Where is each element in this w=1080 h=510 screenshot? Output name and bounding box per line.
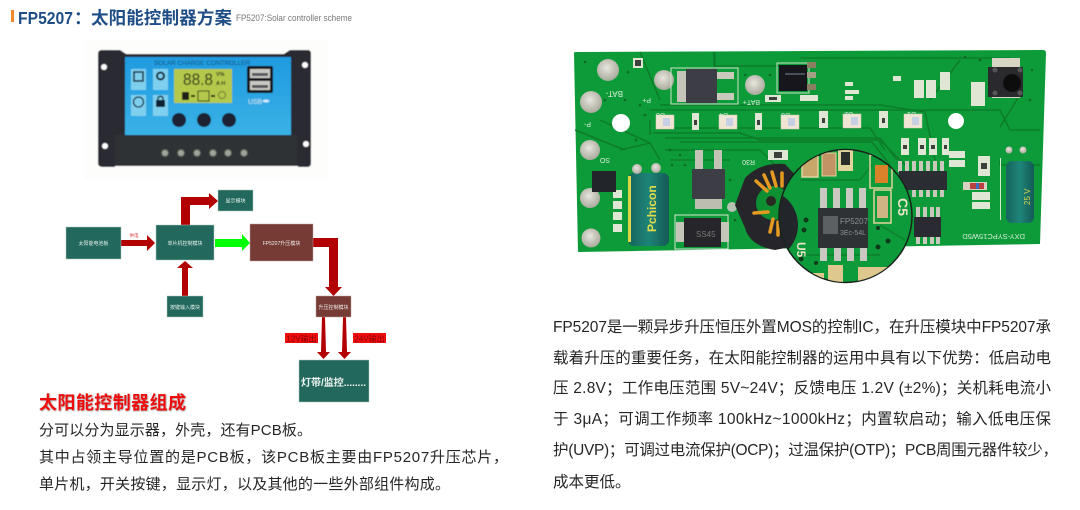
title: 太阳能控制器方案 xyxy=(91,8,232,28)
box: display module: 显示模块 xyxy=(225,198,246,204)
photo: solar charge controller xyxy=(84,40,328,180)
controller LCD: 88.8 xyxy=(183,70,213,89)
PCB diode and small parts xyxy=(963,182,987,190)
PCB middle MOSFET xyxy=(692,150,725,209)
box: load xyxy=(299,360,369,402)
PCB top MOSFET xyxy=(671,68,738,104)
box: FP5207 boost module: FP5207升压模块 xyxy=(263,240,300,247)
PCB LEDs xyxy=(656,114,922,129)
PCB silkscreen labels xyxy=(583,89,1025,241)
arrow: 24V output xyxy=(338,317,351,359)
PCB solder pads xyxy=(580,59,765,248)
PCB silkscreen labels: P+ xyxy=(642,96,651,103)
heading: controller composition: 太阳能控制器组成 xyxy=(39,392,186,413)
label: power supply: 供电 xyxy=(130,232,139,239)
box: boost control module xyxy=(316,296,351,317)
FP5207 IC: 3Ec-54L xyxy=(840,230,866,237)
controller LCD: V% xyxy=(216,72,225,78)
box: boost control module: 升压控制模块 xyxy=(318,304,349,311)
controller function icons xyxy=(131,69,168,116)
PCB silkscreen labels: BAT- xyxy=(605,89,623,98)
controller terminal screws xyxy=(162,150,248,156)
arrow: 12V output xyxy=(317,317,330,359)
text block: FP5207 advantages: 成本更低。 xyxy=(553,473,631,491)
PCB tact switch xyxy=(988,58,1023,98)
PCB small capacitor: 25 V xyxy=(1023,188,1032,205)
box: solar panel: 太阳能电池板 xyxy=(78,240,109,247)
PCB vias xyxy=(584,56,1033,221)
block diagram xyxy=(66,190,386,402)
box: FP5207 boost module xyxy=(250,224,313,261)
controller buttons xyxy=(172,113,236,127)
text block: controller composition: 分可以分为显示器，外壳，还有PCB板。 xyxy=(39,421,312,439)
PCB silkscreen labels: BAT+ xyxy=(743,98,760,105)
text block: FP5207 advantages: 载着升压的重要任务，在太阳能控制器的运用中具有以下优势：低启动电 xyxy=(553,349,1051,367)
text block: controller composition: 单片机，开关按键，显示灯，以及其他的一些外部组件构成。 xyxy=(39,476,450,493)
PCB silkscreen labels: D2 xyxy=(844,110,853,117)
photo: solar charge controller: SOLAR CHARGE CONTROLLER xyxy=(154,61,251,67)
PCB silkscreen labels: D3 xyxy=(781,111,790,118)
PCB SS45 diode xyxy=(675,215,729,249)
PCB left diode xyxy=(592,171,616,192)
PCB small capacitor xyxy=(1000,146,1034,223)
arrow: FP5207 to boost control xyxy=(313,238,342,296)
PCB silkscreen labels: SO xyxy=(599,156,610,163)
PCB small resistors xyxy=(613,58,990,232)
PCB silkscreen labels: R30 xyxy=(742,158,755,165)
PCB large capacitor: Pchicon xyxy=(645,185,659,232)
text block: controller composition xyxy=(39,421,508,493)
magnified traces xyxy=(800,165,905,255)
label: 24V output: 24V输出 xyxy=(354,334,385,344)
PCB silkscreen labels: D1 xyxy=(907,110,916,117)
magnified inductor edge xyxy=(780,196,798,250)
photo: PCB board xyxy=(574,50,1046,283)
box: MCU control: 单片机控制模块 xyxy=(167,240,203,247)
PCB silkscreen labels: DXY-SYPC15W5D xyxy=(962,232,1025,241)
title: ： xyxy=(74,8,92,28)
arrow: solar panel to MCU xyxy=(121,235,155,251)
text block: FP5207 advantages xyxy=(553,318,1058,491)
FP5207 IC: FP5207 xyxy=(840,217,869,226)
magnified vias xyxy=(798,218,890,265)
PCB silkscreen labels: D4 xyxy=(719,111,728,118)
PCB right SOP16 IC xyxy=(898,161,947,197)
magnifier: FP5207 chip close-up: C5 xyxy=(895,198,911,216)
magnifier: FP5207 chip close-up: U5 xyxy=(794,242,808,258)
magnifier: FP5207 chip close-up xyxy=(778,148,913,284)
controller USB ports xyxy=(247,66,273,106)
box: display module xyxy=(218,190,253,211)
PCB silkscreen labels: D6 xyxy=(656,111,665,118)
arrow: MCU to FP5207 xyxy=(215,234,250,251)
PCB large capacitor xyxy=(628,163,669,246)
PCB traces xyxy=(575,52,1040,165)
controller USB ports: USB xyxy=(248,99,262,106)
PCB inductor xyxy=(727,164,800,250)
text block: FP5207 advantages: 压 2.8V；工作电压范围 5V~24V；反馈电压 1.2V (±2%)；关机耗电流小 xyxy=(553,379,1051,397)
PCB mounting holes xyxy=(612,113,964,132)
text block: FP5207 advantages: 于 3μA；可调工作频率 100kHz~1000kHz；内置软启动；输入低电压保 xyxy=(553,410,1051,428)
title: FP5207:Solar controller scheme xyxy=(236,13,352,24)
box: key input module: 按键输入模块 xyxy=(170,304,200,311)
box: key input module xyxy=(167,296,203,317)
title xyxy=(11,8,352,28)
text block: FP5207 advantages: FP5207是一颗异步升压恒压外置MOS的控制IC，在升压模块中FP5207承 xyxy=(553,318,1051,336)
PCB black sensor xyxy=(777,62,816,93)
arrow: MCU to display xyxy=(181,193,218,225)
PCB silkscreen labels: P- xyxy=(583,120,591,127)
controller LCD xyxy=(174,69,232,103)
box: load: 灯带/监控........ xyxy=(301,376,366,389)
text block: FP5207 advantages: 护(UVP)；可调过电流保护(OCP)；过温保护(OTP)；PCB周围元器件较少， xyxy=(553,441,1058,459)
box: MCU control xyxy=(156,225,214,260)
text block: controller composition: 其中占领主导位置的是PCB板，该PCB板主要由FP5207升压芯片， xyxy=(39,448,508,466)
title: FP5207 xyxy=(18,8,73,28)
box: solar panel xyxy=(66,227,121,259)
arrow: key input to MCU xyxy=(177,261,193,296)
PCB SS45 diode: SS45 xyxy=(696,230,716,239)
FP5207 IC xyxy=(818,188,869,261)
controller LCD: A H xyxy=(216,81,225,87)
label: 12V output: 12V输出 xyxy=(286,334,317,344)
PCB IC3 SOP8 xyxy=(914,207,941,244)
magnified passives xyxy=(802,150,892,283)
